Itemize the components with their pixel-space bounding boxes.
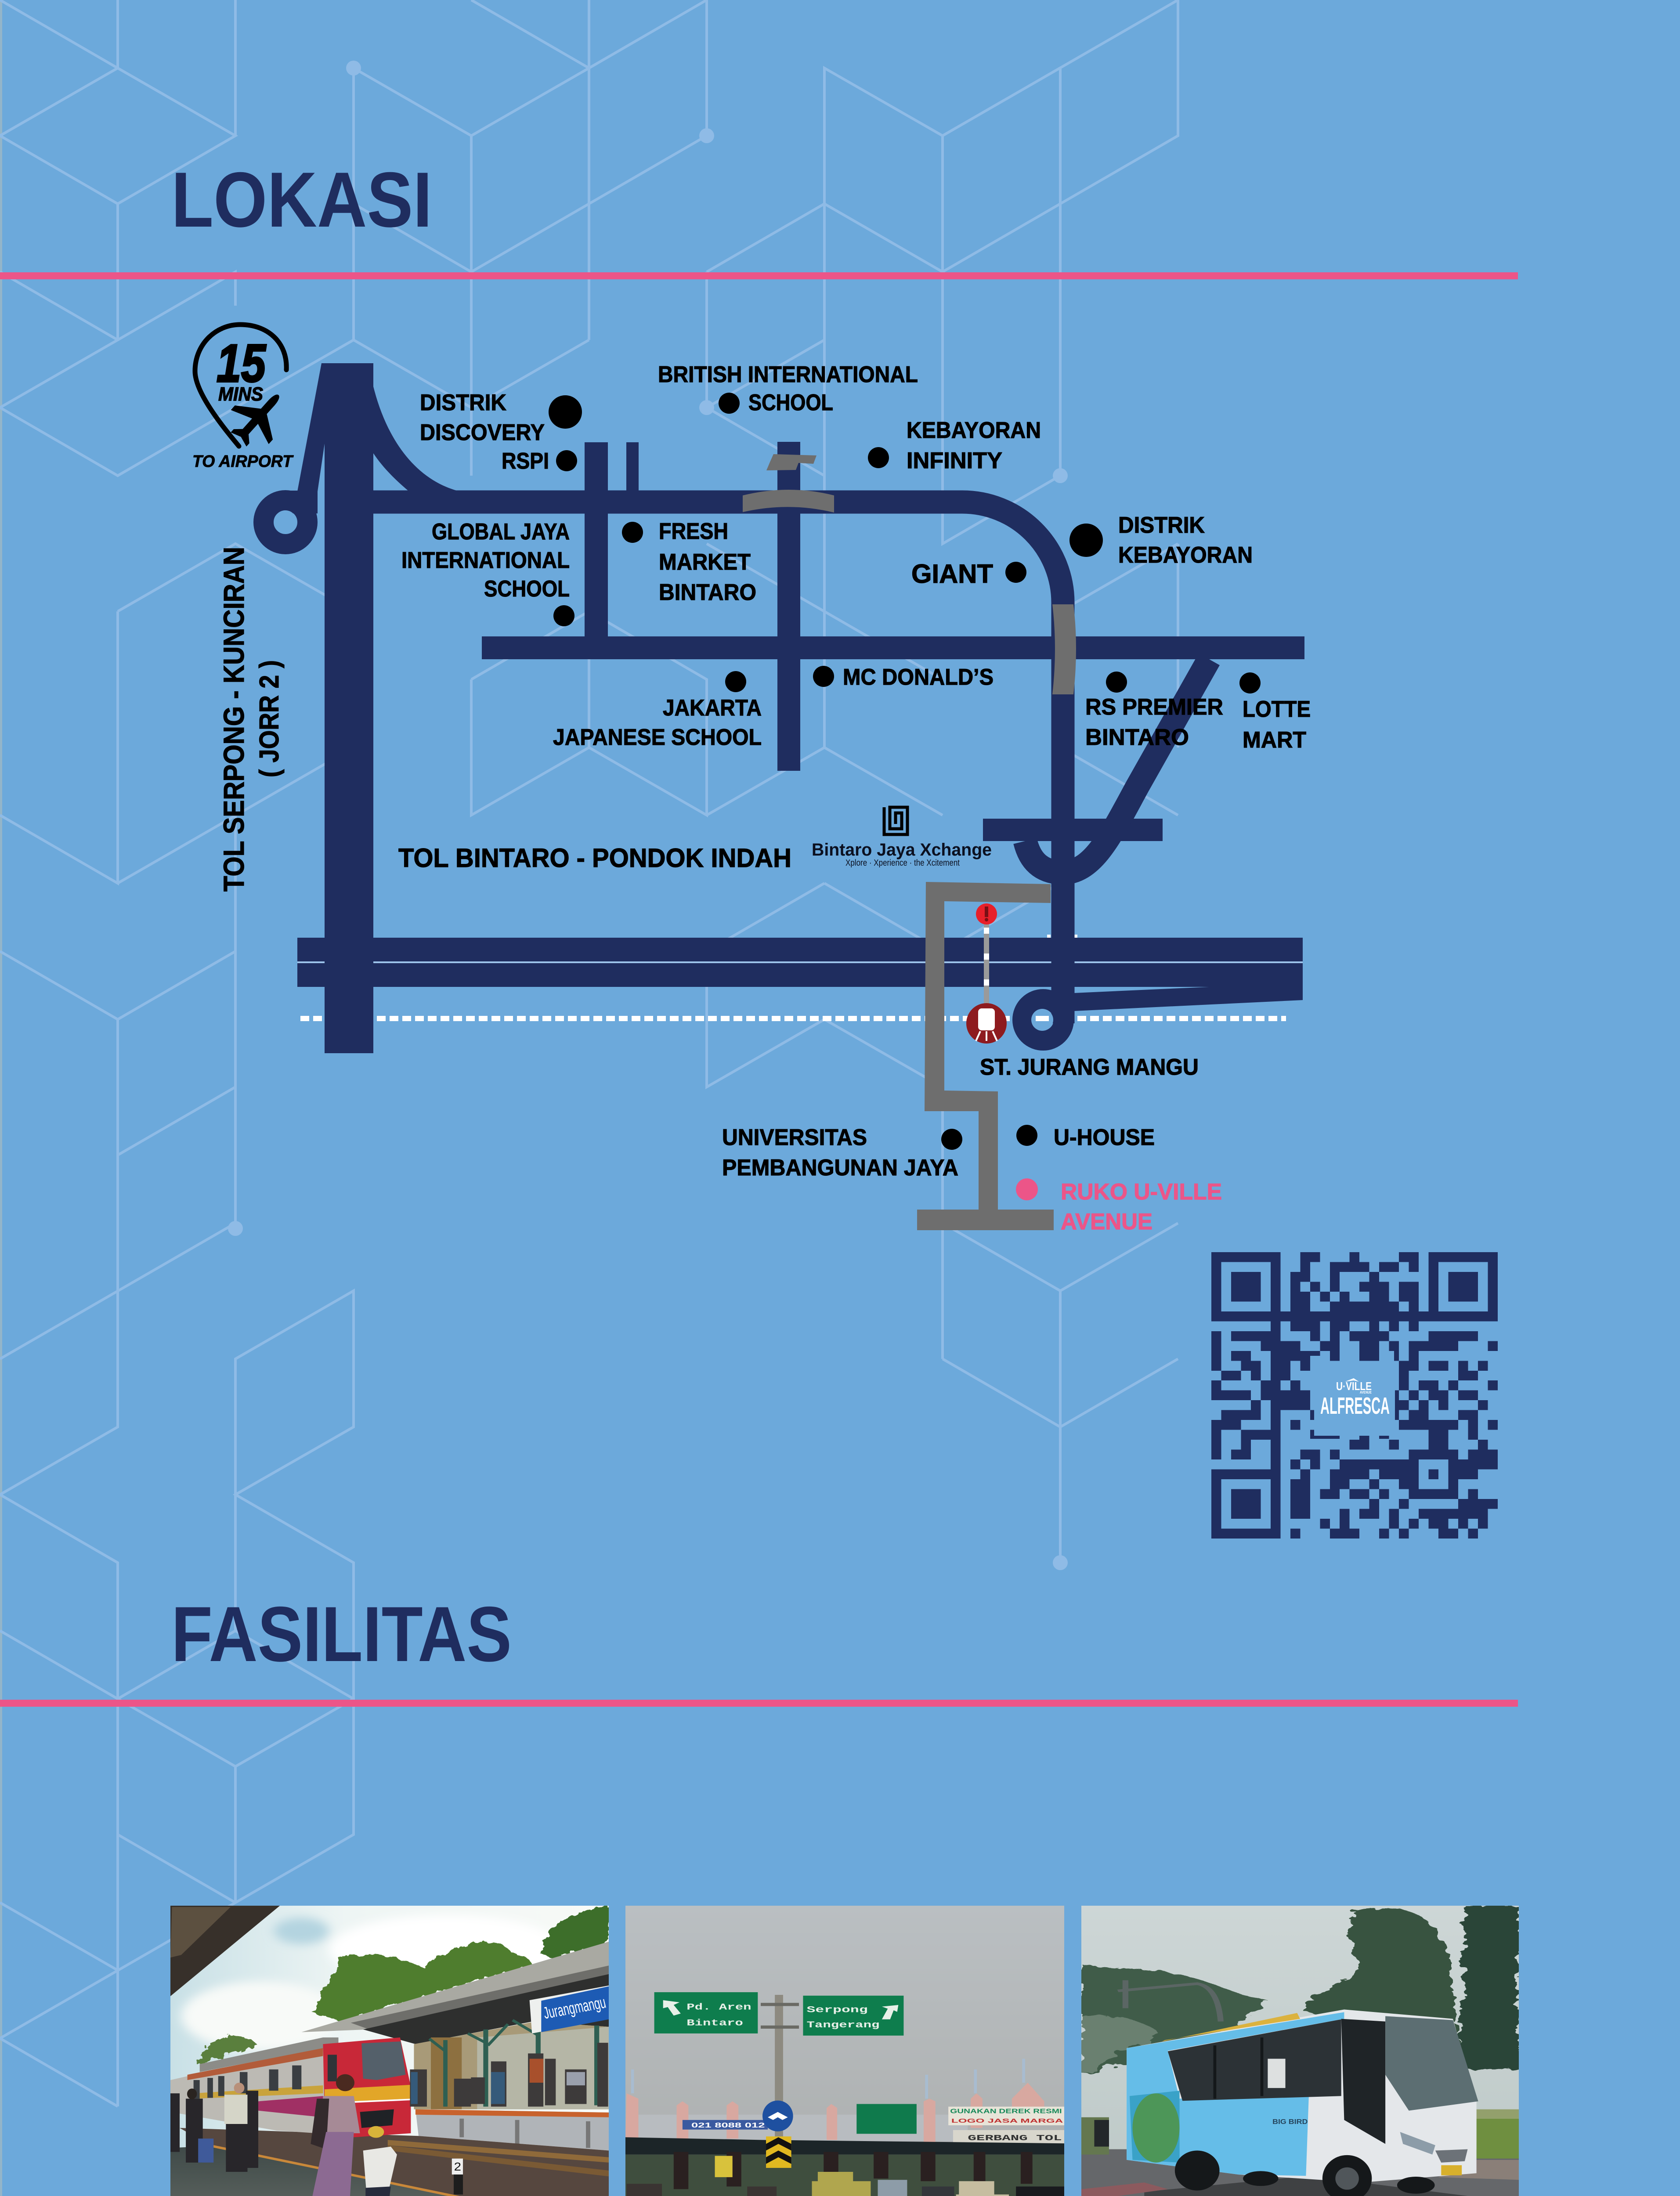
QR code bbox=[1211, 1252, 1498, 1539]
pin: Global Jaya International School: SCHOOL bbox=[484, 576, 570, 602]
trees bbox=[1081, 1906, 1519, 2075]
station canopy bbox=[301, 1942, 609, 2109]
pin: Universitas Pembangunan Jaya: PEMBANGUNAN JAYA bbox=[722, 1155, 958, 1181]
pin: Lotte Mart bbox=[1239, 672, 1311, 753]
platform far bbox=[415, 2109, 609, 2151]
photo: Tol Pondok Aren bbox=[625, 1906, 1064, 2196]
pin: Universitas Pembangunan Jaya bbox=[722, 1125, 962, 1181]
toll towers and truss bbox=[625, 2059, 1044, 2142]
road network bbox=[264, 442, 1304, 1040]
gravel and track bbox=[180, 2128, 609, 2196]
route: grey access route bbox=[917, 882, 1054, 1230]
pin: Ruko U-Ville Avenue bbox=[1016, 1178, 1222, 1235]
pin: Global Jaya International School: INTERNATIONAL bbox=[401, 548, 570, 573]
pin: Kebayoran Infinity: INFINITY bbox=[907, 448, 1002, 473]
pin: RS Premier Bintaro bbox=[1085, 672, 1223, 750]
bus: BIG BIRD bbox=[1272, 2118, 1308, 2125]
icon: plane bbox=[220, 378, 297, 456]
pin: Kebayoran Infinity bbox=[868, 418, 1041, 473]
traffic signal arm bbox=[1118, 1980, 1221, 2022]
motorbike bbox=[1094, 2120, 1109, 2146]
pin: Distrik Kebayoran: KEBAYORAN bbox=[1118, 542, 1253, 568]
photo: Intrans Bintaro bbox=[1081, 1906, 1519, 2196]
pin: RS Premier Bintaro: BINTARO bbox=[1085, 725, 1189, 750]
gantry signs: Tangerang bbox=[806, 2020, 880, 2030]
plaza signs: 021 8088 012 bbox=[691, 2121, 765, 2129]
label: toll Serpong - Kunciran: TOL SERPONG - KUNCIRAN bbox=[217, 547, 250, 892]
text: 15: 15 bbox=[217, 333, 267, 393]
pin: Lotte Mart: MART bbox=[1243, 727, 1306, 753]
icon: 15 mins to airport pin bbox=[192, 325, 297, 471]
label: St. Jurang Mangu: ST. JURANG MANGU bbox=[980, 1055, 1199, 1080]
gantry signs bbox=[654, 1992, 903, 2196]
pin: Fresh Market Bintaro: MARKET bbox=[659, 549, 751, 575]
pin: Distrik Kebayoran: DISTRIK bbox=[1118, 513, 1205, 538]
bus bbox=[1127, 2009, 1478, 2196]
pin: Jakarta Japanese School bbox=[553, 671, 762, 750]
logo: Bintaro Jaya Xchange: Bintaro Jaya Xchange bbox=[812, 840, 992, 860]
pin: Jakarta Japanese School: JAKARTA bbox=[663, 695, 762, 721]
QR logo: U-Ville Alfresca: U·VILLE bbox=[1336, 1380, 1372, 1393]
overpass segments bbox=[743, 454, 1076, 694]
pin: Distrik Kebayoran bbox=[1069, 513, 1253, 568]
gantry signs: Bintaro bbox=[686, 2018, 743, 2028]
pin: Fresh Market Bintaro: FRESH bbox=[659, 519, 728, 544]
plaza signs bbox=[683, 2104, 1064, 2143]
text: to airport: TO AIRPORT bbox=[192, 452, 294, 471]
railway dashed line bbox=[300, 1016, 1286, 1021]
waiting passengers bbox=[410, 2043, 608, 2107]
pin: Fresh Market Bintaro bbox=[622, 519, 756, 605]
pin: British International School: SCHOOL bbox=[748, 390, 833, 415]
round sign bbox=[762, 2101, 793, 2168]
pin: U-House: U-HOUSE bbox=[1054, 1125, 1155, 1150]
plaza canopy bbox=[625, 2137, 1064, 2196]
road: toll Serpong - Kunciran bbox=[297, 363, 457, 1053]
left passengers bbox=[170, 2083, 258, 2172]
pin: Giant: GIANT bbox=[911, 559, 993, 589]
cars bbox=[627, 2172, 1064, 2196]
icon: train station bbox=[966, 1003, 1007, 1044]
label: JORR 2: ( JORR 2 ) bbox=[254, 660, 285, 777]
ground bbox=[1081, 2149, 1519, 2196]
background hexagon line pattern bbox=[0, 0, 1178, 2106]
pin: Kebayoran Infinity: KEBAYORAN bbox=[907, 418, 1041, 443]
QR logo: U-Ville Alfresca bbox=[1320, 1378, 1390, 1419]
logo: Bintaro Jaya Xchange: Xplore · Xperience · the Xcitement bbox=[845, 858, 960, 868]
logo: Bintaro Jaya Xchange bbox=[812, 807, 992, 868]
divider: FASILITAS pink rule bbox=[0, 1700, 1518, 1707]
photo: Stasiun Jurangmangu bbox=[170, 1906, 609, 2196]
train bbox=[170, 2037, 411, 2137]
heading: LOKASI: LOKASI bbox=[171, 156, 432, 243]
pin: Global Jaya International School: GLOBAL JAYA bbox=[432, 519, 570, 545]
platform near bbox=[170, 2146, 609, 2196]
pin: Fresh Market Bintaro: BINTARO bbox=[659, 580, 756, 605]
gantry signs: Pd. Aren bbox=[686, 2002, 751, 2012]
pin: RSPI: RSPI bbox=[502, 448, 549, 474]
pin: Universitas Pembangunan Jaya: UNIVERSITAS bbox=[722, 1125, 867, 1150]
pin: Distrik Discovery bbox=[420, 390, 582, 445]
pin: RS Premier Bintaro: RS PREMIER bbox=[1085, 694, 1223, 720]
pin: Global Jaya International School bbox=[401, 519, 574, 626]
road: toll Bintaro - Pondok Indah bbox=[297, 935, 1303, 987]
QR logo: U-Ville Alfresca: ALFRESCA bbox=[1320, 1393, 1390, 1419]
woman bbox=[311, 2074, 360, 2196]
pin: Lotte Mart: LOTTE bbox=[1243, 697, 1311, 722]
pin: British International School bbox=[658, 362, 918, 415]
pin: British International School: BRITISH INTERNATIONAL bbox=[658, 362, 918, 387]
pin: Distrik Discovery: DISTRIK bbox=[420, 390, 506, 415]
QR logo: U-Ville Alfresca: AVENUE bbox=[1360, 1391, 1372, 1394]
pin: Mc Donald's: MC DONALD’S bbox=[843, 665, 994, 690]
text: MINS: MINS bbox=[218, 383, 263, 405]
icon: rail crossing pin and link bbox=[976, 903, 997, 1006]
pin: Distrik Discovery: DISCOVERY bbox=[420, 420, 545, 445]
pin: Jakarta Japanese School: JAPANESE SCHOOL bbox=[553, 725, 762, 750]
pin: Ruko U-Ville Avenue: AVENUE bbox=[1061, 1209, 1153, 1235]
boy bbox=[363, 2126, 397, 2196]
track marker: 2 bbox=[454, 2160, 461, 2173]
gantry signs: Serpong bbox=[806, 2005, 868, 2015]
label: toll Bintaro - Pondok Indah: TOL BINTARO - PONDOK INDAH bbox=[398, 843, 791, 873]
map: location road map bbox=[192, 325, 1311, 1235]
pin: Ruko U-Ville Avenue: RUKO U-VILLE bbox=[1061, 1179, 1222, 1205]
track marker bbox=[452, 2159, 463, 2195]
divider: LOKASI pink rule bbox=[0, 272, 1518, 279]
heading: FASILITAS: FASILITAS bbox=[171, 1590, 512, 1678]
